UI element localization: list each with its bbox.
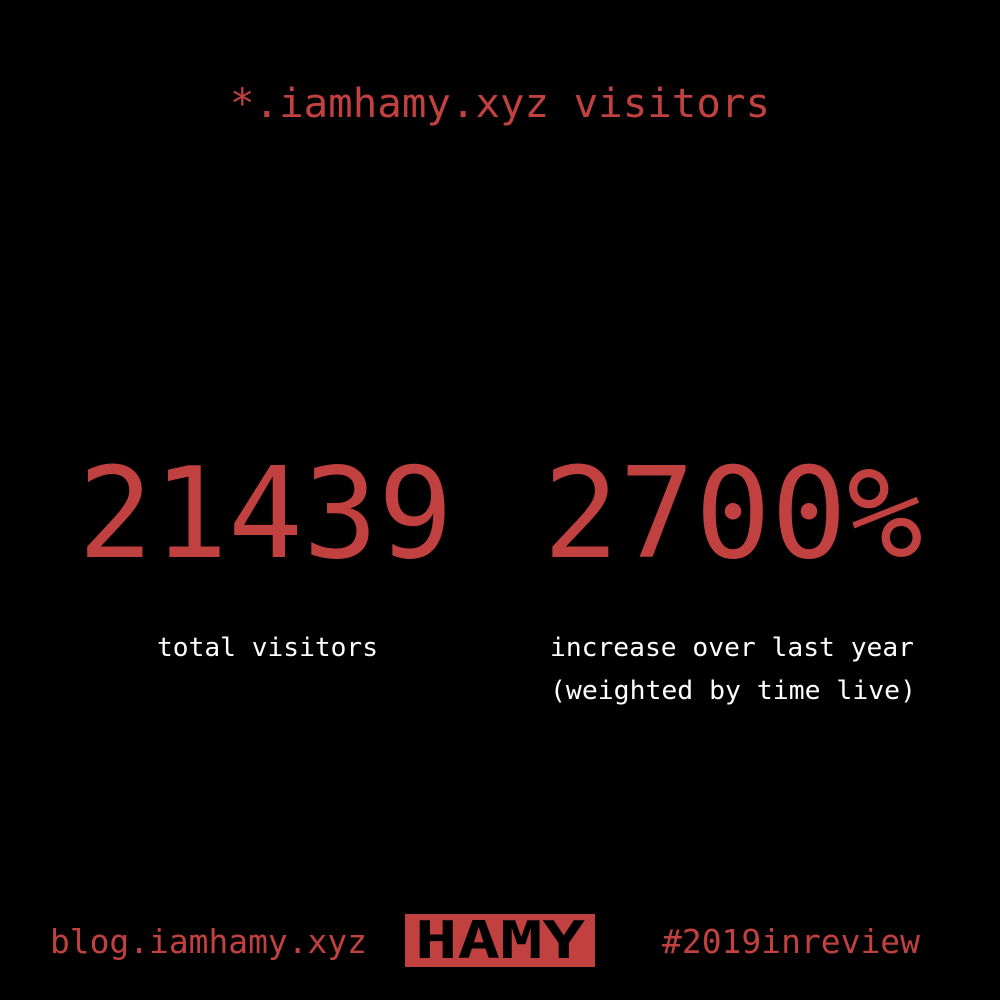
label: total visitors: total visitors — [157, 633, 378, 663]
logo: HAMY — [405, 911, 595, 971]
footer: blog url: blog.iamhamy.xyz — [50, 922, 367, 961]
footer: hashtag: #2019inreview — [662, 922, 920, 961]
label: weighted by time live: (weighted by time live) — [550, 676, 916, 706]
label: increase over last year: increase over last year — [550, 633, 914, 663]
logo: HAMY: HAMY — [415, 911, 586, 971]
stat: increase — [543, 440, 923, 706]
title: *.iamhamy.xyz visitors — [230, 81, 770, 127]
big number: 2700%: 2700% — [543, 440, 923, 587]
big number: 21439: 21439 — [78, 440, 453, 587]
stat: total visitors — [78, 440, 453, 663]
